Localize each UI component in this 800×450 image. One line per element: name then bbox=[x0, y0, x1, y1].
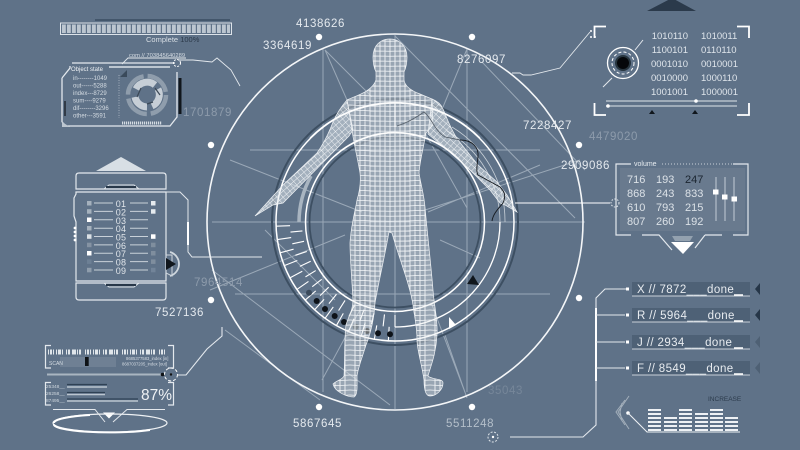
rings over figure bbox=[310, 102, 480, 156]
tick gauge bbox=[276, 226, 395, 341]
inner scanner rings bbox=[272, 99, 518, 345]
panel: scan readout: SCAN bbox=[49, 361, 63, 367]
panel: numbered list: 03 bbox=[116, 216, 126, 226]
number labels: 8276097 bbox=[457, 54, 506, 66]
geometric web lines bbox=[210, 35, 585, 409]
panel: object state: Object state bbox=[71, 67, 104, 73]
icon: ellipse platform bbox=[53, 410, 167, 432]
panel: numbered list: 01 bbox=[116, 199, 126, 209]
icon: target bbox=[164, 368, 178, 381]
panel: done list: F // 8549___done bbox=[637, 363, 734, 375]
panel: numbered list: 04 bbox=[116, 224, 126, 234]
panel: volume: 610 bbox=[627, 202, 645, 214]
panel: volume: 793 bbox=[656, 202, 674, 214]
panel: binary readout: 0010000 bbox=[651, 73, 688, 84]
bottom target bbox=[488, 432, 498, 442]
panel: volume: 868 bbox=[627, 188, 645, 200]
icon: up triangle bbox=[96, 157, 146, 171]
panel: numbered list bbox=[74, 157, 262, 300]
panel: numbered list: 02 bbox=[116, 208, 126, 218]
panel: binary readout: 0110110 bbox=[701, 45, 737, 56]
panel: volume: 260 bbox=[656, 216, 674, 228]
panel: object state: index---8729 bbox=[73, 91, 107, 97]
panel: object state: other---3591 bbox=[73, 114, 107, 120]
panel: numbered list: 07 bbox=[116, 249, 126, 259]
panel: object state: sum----9279 bbox=[73, 98, 106, 104]
panel: binary readout: 1100101 bbox=[652, 45, 688, 56]
number labels: 4479020 bbox=[589, 131, 638, 143]
number labels: 2909086 bbox=[561, 160, 610, 172]
panel: object state: out------5288 bbox=[73, 84, 107, 90]
panel: volume: 716 bbox=[627, 174, 645, 186]
wireframe human figure bbox=[255, 39, 517, 397]
panel: binary readout: 1001001 bbox=[651, 87, 688, 98]
panel: binary readout: 1000110 bbox=[701, 73, 737, 84]
icon: eye lens bbox=[603, 40, 643, 87]
panel: binary readout: 1010011 bbox=[701, 31, 737, 42]
panel: volume: 193 bbox=[656, 174, 674, 186]
panel: volume: 215 bbox=[685, 202, 703, 214]
panel: object state: in--------1049 bbox=[73, 76, 108, 82]
panel: object state bbox=[62, 53, 240, 127]
panel: done list: X // 7872___done bbox=[637, 284, 734, 296]
panel: binary readout bbox=[512, 0, 749, 115]
number labels: 4138626 bbox=[296, 18, 345, 30]
panel: volume: 247 bbox=[685, 174, 703, 186]
panel: scan readout: 26258__ bbox=[46, 391, 65, 397]
number labels: 35043 bbox=[488, 385, 523, 397]
progress bar bbox=[60, 20, 232, 44]
panel: scan readout: 8685377583_index [in] bbox=[126, 356, 168, 361]
panel: done list: J // 2934___done bbox=[637, 337, 732, 349]
panel: numbered list: 06 bbox=[116, 241, 126, 251]
panel: binary readout: 0001010 bbox=[651, 59, 688, 70]
number labels: 7228427 bbox=[523, 120, 572, 132]
number labels: 7964514 bbox=[194, 277, 243, 289]
panel: volume: 243 bbox=[656, 188, 674, 200]
ring dots bbox=[208, 34, 582, 410]
panel: volume: 807 bbox=[627, 216, 645, 228]
panel: scan readout: 87% bbox=[141, 387, 172, 404]
panel: scan readout: 87495__ bbox=[46, 398, 65, 404]
panel: scan readout: 25348__ bbox=[46, 384, 65, 390]
panel: object state: dif--------3296 bbox=[73, 106, 109, 112]
progress bar: Complete 100% bbox=[146, 35, 200, 44]
number labels: 3364619 bbox=[263, 40, 312, 52]
panel: numbered list: 09 bbox=[116, 266, 126, 276]
equalizer bbox=[616, 396, 742, 432]
panel: object state: com // 703845640289 bbox=[129, 53, 185, 59]
number labels: 1701879 bbox=[183, 107, 232, 119]
panel: done list bbox=[510, 282, 760, 437]
gauge triangles bbox=[449, 275, 479, 329]
icon: segmented dial bbox=[128, 76, 166, 114]
icon: top triangle bbox=[647, 0, 696, 11]
panel: volume bbox=[515, 161, 748, 254]
number labels: 5511248 bbox=[446, 418, 494, 430]
panel: volume: volume bbox=[634, 161, 657, 168]
panel: scan readout: 8687037205_index [out] bbox=[122, 362, 167, 366]
panel: scan readout bbox=[46, 327, 222, 405]
equalizer: INCREASE bbox=[708, 396, 742, 403]
nerve path bbox=[397, 112, 505, 221]
panel: volume: 833 bbox=[685, 188, 703, 200]
outer ring bbox=[207, 34, 583, 410]
number labels: 7527136 bbox=[155, 307, 204, 319]
number labels: 5867645 bbox=[293, 418, 342, 430]
panel: numbered list: 08 bbox=[116, 258, 126, 268]
icon: play gauge bbox=[166, 252, 179, 276]
panel: numbered list: 05 bbox=[116, 232, 126, 242]
panel: binary readout: 0010001 bbox=[701, 59, 738, 70]
gauge dots bbox=[306, 290, 393, 337]
number labels bbox=[155, 18, 638, 430]
panel: done list: R // 5964___done bbox=[637, 310, 735, 322]
icon: down triangles bbox=[671, 236, 694, 254]
panel: binary readout: 1000001 bbox=[701, 87, 738, 98]
panel: binary readout: 1010110 bbox=[652, 31, 688, 42]
panel: volume: 192 bbox=[685, 216, 703, 228]
